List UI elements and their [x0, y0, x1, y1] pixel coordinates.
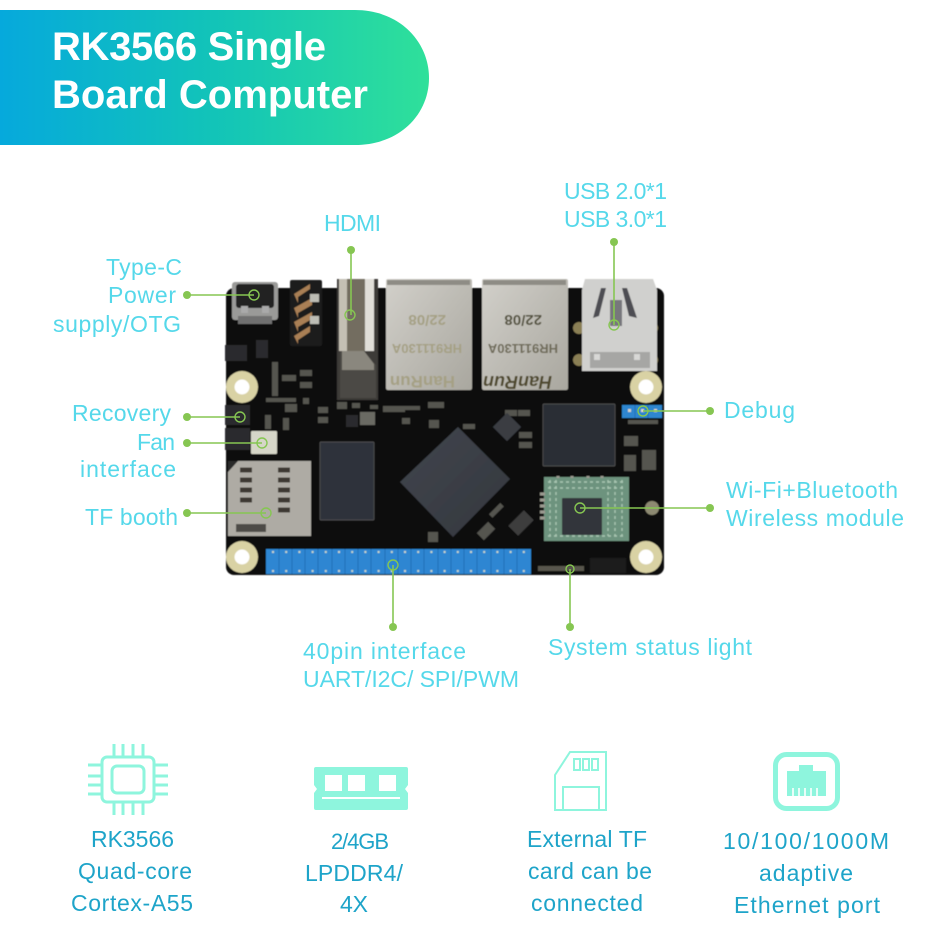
title banner	[0, 10, 429, 145]
callout: Type-C: Type-C	[106, 254, 182, 280]
PCB	[226, 288, 664, 575]
callout: Wi-Fi and Bluetooth: Wi-Fi+Bluetooth	[726, 477, 898, 503]
ethernet jack 1: 22/08	[408, 311, 446, 328]
icon: Ethernet port	[776, 754, 838, 808]
feature: processor: RK3566	[91, 826, 174, 852]
callout: Recovery: Recovery	[72, 400, 172, 426]
callout: HDMI: HDMI	[324, 210, 381, 236]
icon: SD card	[555, 752, 606, 810]
callout: 40pin interface: 40pin interface	[303, 638, 466, 664]
SoC chip	[400, 427, 510, 537]
IPEX antenna socket	[645, 501, 659, 515]
feature: memory: 2/4GB	[331, 829, 389, 854]
callout: TF booth: TF booth	[85, 504, 178, 530]
audio jack	[290, 280, 322, 346]
callout: USB: USB 3.0*1	[564, 206, 667, 232]
USB-A connector	[573, 279, 658, 371]
RAM chip	[543, 404, 615, 466]
feature: memory: LPDDR4/	[305, 860, 404, 886]
feature: TF card: External TF	[527, 826, 647, 852]
ethernet jack 2	[482, 279, 568, 392]
status LEDs	[538, 566, 584, 571]
feature: Ethernet: adaptive	[759, 860, 853, 886]
feature: Ethernet	[723, 754, 889, 918]
title	[52, 25, 368, 117]
callout: 40pin interface: UART/I2C/ SPI/PWM	[303, 666, 519, 692]
callout: Type-C	[53, 254, 259, 337]
icon: CPU	[88, 744, 168, 815]
feature: Ethernet: 10/100/1000M	[723, 828, 889, 854]
debug pins	[622, 405, 662, 418]
callout: TF booth	[85, 504, 271, 530]
callout: HDMI	[324, 210, 381, 320]
title: RK3566 Single	[52, 25, 326, 69]
feature: TF card: connected	[531, 890, 643, 916]
ethernet jack 1: HR911130A	[391, 341, 462, 356]
ethernet jack 2: 22/08	[504, 311, 542, 328]
callout: Fan interface	[80, 429, 267, 482]
40-pin GPIO header	[266, 549, 531, 574]
feature: TF card: card can be	[528, 858, 652, 884]
mounting holes	[226, 371, 662, 573]
Wi-Fi module	[540, 476, 629, 541]
feature: memory: 4X	[340, 891, 368, 917]
eMMC chip	[320, 442, 374, 520]
TF card slot	[228, 461, 311, 536]
callout: USB	[564, 178, 667, 330]
callout: Fan interface: Fan	[137, 429, 175, 455]
small components	[265, 362, 658, 542]
fan connector	[251, 431, 277, 454]
ethernet jack 1	[386, 279, 472, 391]
callout: Debug	[638, 397, 795, 423]
icon: RAM module	[314, 767, 408, 810]
callout: Recovery	[72, 400, 245, 426]
callout: Type-C: Power	[108, 282, 176, 308]
callout: Debug: Debug	[724, 397, 795, 423]
feature: memory	[305, 767, 408, 917]
callout: Type-C: supply/OTG	[53, 311, 181, 337]
ethernet jack 1: HanRun	[390, 372, 455, 391]
callout: Fan interface: interface	[80, 456, 176, 482]
dark packages	[225, 340, 626, 573]
callout: Wi-Fi and Bluetooth: Wireless module	[726, 505, 904, 531]
title: Board Computer	[52, 73, 368, 117]
USB-C connector	[232, 282, 278, 324]
feature: Ethernet: Ethernet port	[734, 892, 881, 918]
callout: System status light: System status light	[548, 634, 753, 660]
ethernet jack 2: HanRun	[483, 372, 552, 392]
HDMI connector	[337, 279, 378, 400]
feature: processor: Quad-core	[78, 858, 192, 884]
callout: Wi-Fi and Bluetooth	[575, 477, 904, 531]
feature: processor	[71, 744, 193, 916]
callout: USB: USB 2.0*1	[564, 178, 667, 204]
callout: 40pin interface	[303, 560, 519, 692]
ethernet jack 2: HR911130A	[487, 341, 558, 356]
callout: System status light	[548, 565, 753, 660]
feature: processor: Cortex-A55	[71, 890, 193, 916]
feature: TF card	[527, 752, 652, 916]
board photo illustration	[225, 279, 664, 575]
